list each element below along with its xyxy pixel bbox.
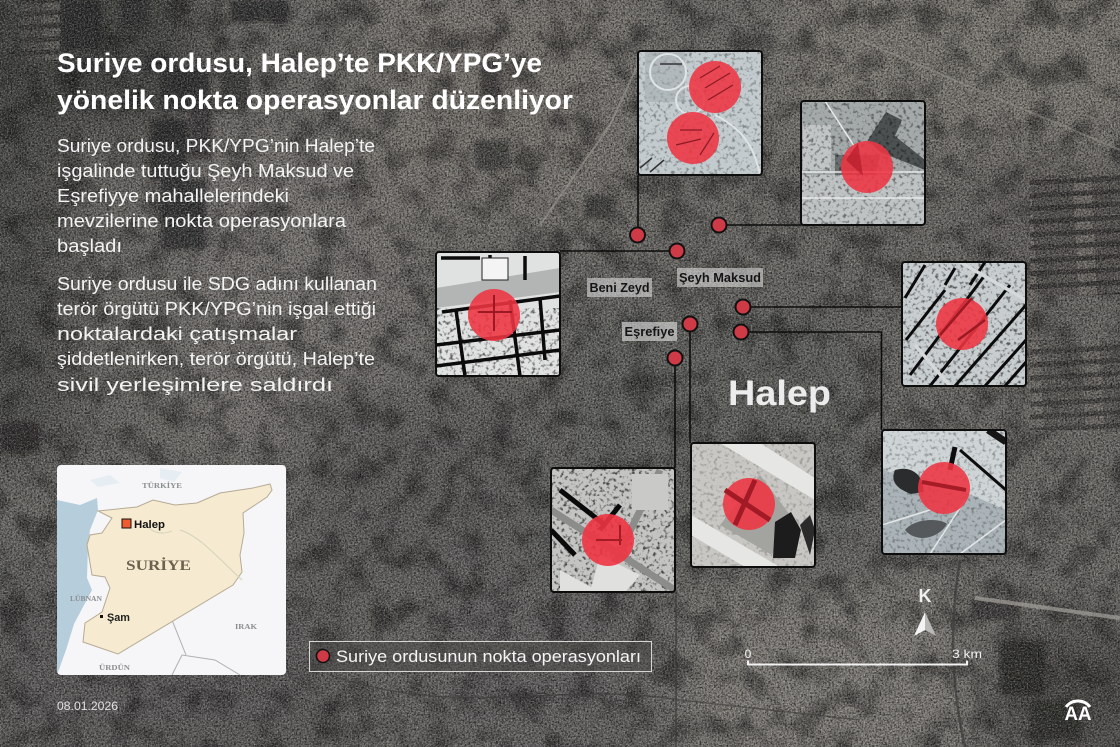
district labels: Eşrefiye — [624, 325, 675, 339]
locator map: ÜRDÜN — [99, 663, 131, 672]
district labels: Beni Zeyd — [590, 281, 650, 295]
city label: Halep: Halep — [728, 374, 831, 413]
north arrow — [914, 586, 936, 636]
text block: second paragraph: Suriye ordusu ile SDG adını kullanan — [57, 274, 377, 294]
title: Suriye ordusu, Halep’te PKK/YPG’ye — [57, 48, 542, 78]
locator map — [57, 465, 286, 675]
text block: second paragraph: sivil yerleşimlere saldırdı — [57, 375, 333, 395]
district labels — [587, 268, 763, 341]
inset photo D — [902, 262, 1026, 386]
connector lines — [560, 175, 902, 468]
text block: second paragraph: terör örgütü PKK/YPG’nin işgal ettiği — [57, 299, 376, 319]
title: yönelik nokta operasyonlar düzenliyor — [57, 85, 574, 115]
text block: second paragraph — [57, 274, 377, 395]
inset photo B — [801, 101, 925, 225]
legend — [310, 642, 652, 672]
inset photo A with two operation areas — [638, 51, 762, 175]
operation point markers — [630, 218, 750, 366]
scale bar: 3 km — [952, 647, 982, 661]
locator map: IRAK — [235, 622, 257, 631]
scale bar: 0 — [745, 647, 752, 661]
locator map: SURİYE — [126, 557, 191, 574]
Halep marker — [122, 519, 131, 528]
text block: first paragraph: Suriye ordusu, PKK/YPG’nin Halep’te — [57, 136, 375, 156]
logo: AA: AA — [1064, 704, 1092, 725]
text block: second paragraph: noktalardaki çatışmalar — [57, 324, 297, 344]
text block: first paragraph — [57, 136, 375, 256]
title — [57, 48, 574, 115]
scale bar — [745, 647, 982, 664]
locator map: Halep — [134, 519, 165, 531]
inset photo C — [436, 252, 560, 376]
inset photo F — [691, 443, 815, 567]
legend: Suriye ordusunun nokta operasyonları — [336, 648, 641, 666]
date: 08.01.2026 — [57, 701, 118, 713]
text block: first paragraph: Eşrefiyye mahallelerindeki — [57, 186, 289, 206]
inset photo G — [551, 468, 675, 592]
locator map: Şam — [107, 612, 130, 624]
locator map: LÜBNAN — [70, 594, 103, 603]
text block: first paragraph: işgalinde tuttuğu Şeyh Maksud ve — [57, 161, 354, 181]
inset photo E — [882, 430, 1006, 554]
north arrow: K — [918, 586, 932, 606]
text block: first paragraph: mevzilerine nokta operasyonlara — [57, 211, 347, 231]
locator map: TÜRKİYE — [142, 480, 182, 490]
district labels: Şeyh Maksud — [679, 271, 761, 285]
text block: first paragraph: başladı — [57, 236, 122, 256]
text block: second paragraph: şiddetlenirken, terör örgütü, Halep’te — [57, 349, 375, 369]
